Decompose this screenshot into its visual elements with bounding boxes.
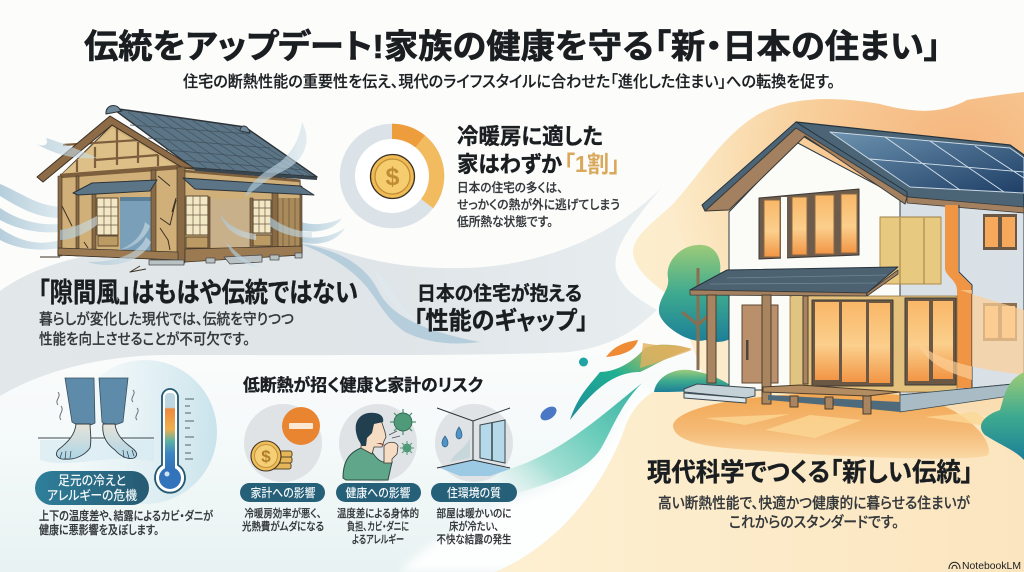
risk card: living environment: 不快な結露の発生 [436, 532, 512, 546]
posts [58, 167, 302, 263]
warm heat flow [915, 290, 1024, 380]
wave: performance gap band [0, 187, 662, 396]
illustration: modern insulated house with solar panels [684, 122, 1024, 460]
illustration: donut chart with coin [348, 132, 437, 220]
roof barge boards [702, 122, 907, 211]
icon: thermometer [155, 389, 194, 493]
risk card: health: よるアレルギー [352, 533, 404, 546]
walls [729, 142, 905, 390]
lower panels [98, 235, 271, 248]
text block: new tradition: 現代科学でつくる「新しい伝統」 [647, 459, 973, 487]
roof [112, 108, 317, 177]
porch roof [690, 267, 898, 293]
risk card: living environment: 部屋は暖かいのに [436, 506, 512, 520]
foundation [900, 383, 1024, 412]
text block: only 10 percent: 家はわずか [457, 152, 562, 177]
risk card: health: 温度差による身体的 [337, 506, 419, 520]
heading: performance gap [414, 282, 588, 335]
lower windows [812, 298, 956, 386]
awnings [73, 180, 157, 195]
side windows [983, 214, 1017, 341]
wind behind house [0, 184, 345, 250]
text block: only 10 percent: 日本の住宅の多くは、 [457, 180, 563, 195]
barge boards [37, 116, 194, 182]
illustration: cold feet [38, 360, 217, 504]
text block: only 10 percent: 低所熱な状態です。 [457, 214, 553, 229]
ground floor cutaway [790, 296, 957, 392]
shoji windows [97, 196, 271, 235]
warm background: new house side [495, 92, 1024, 572]
cutaway insulation and orange layer [880, 217, 941, 284]
heading: performance gap: 「性能のギャップ」 [414, 307, 588, 335]
right bush [981, 372, 1024, 460]
solar panels [830, 132, 1024, 193]
illustration: old Japanese house with drafts [0, 105, 345, 272]
text block: drafts are no longer tradition [38, 278, 358, 348]
text block: drafts are no longer tradition: 性能を向上させることが不可欠です。 [39, 330, 250, 348]
wind front [33, 122, 312, 268]
doorway [120, 197, 151, 251]
risk card: household budget [240, 404, 325, 533]
title: 伝統をアップデート!家族の健康を守る「新・日本の住まい」 [84, 28, 941, 66]
gable timbers [60, 128, 300, 181]
pill: cold feet and allergy: アレルギーの危機 [47, 488, 137, 503]
risk card: health [336, 404, 421, 546]
risk card: health: 健康への影響 [346, 485, 410, 500]
wall cracks [62, 176, 176, 250]
upper windows [759, 189, 859, 259]
risk card: living environment: 床が冷たい、 [449, 519, 499, 533]
text block: cold feet description [39, 508, 213, 537]
text block: only 10 percent [457, 124, 620, 229]
text block: cold feet description: 上下の温度差や、結露によるカビ・ダニが [39, 508, 213, 523]
text block: drafts are no longer tradition: 暮らしが変化した現代では、伝統を守りつつ [39, 310, 294, 328]
risk card: living environment: 住環境の質 [447, 485, 501, 500]
decorative leaves [538, 340, 692, 423]
text block: new tradition: 高い断熱性能で、快適かつ健康的に暮らせる住まいが [658, 494, 970, 512]
text block: only 10 percent: 「1割」 [564, 151, 620, 177]
risk card: household budget: 家計への影響 [250, 485, 316, 500]
pill: cold feet and allergy: 足元の冷えと [58, 473, 126, 488]
pill: cold feet and allergy [35, 471, 149, 505]
text block: only 10 percent: 冷暖房に適した [457, 124, 603, 149]
text block: cold feet description: 健康に悪影響を及ぼします。 [39, 522, 159, 537]
icon: coin: $ [386, 163, 400, 191]
ground glow [673, 393, 989, 459]
text block: new tradition: これからのスタンダードです。 [729, 513, 899, 531]
heading: risks: 低断熱が招く健康と家計のリスク [243, 375, 483, 395]
walls [58, 125, 302, 260]
roof [796, 122, 1024, 208]
text block: only 10 percent: せっかくの熱が外に逃げてしまう [457, 197, 620, 212]
text block: drafts are no longer tradition: 「隙間風」はもはや伝統ではない [38, 278, 358, 308]
risk card: household budget: $ [261, 447, 271, 466]
risk card: household budget: 光熱費がムダになる [242, 519, 324, 533]
subtitle: 住宅の断熱性能の重要性を伝え、現代のライフスタイルに合わせた「進化した住まい」への転換を促す。 [183, 73, 835, 91]
door and posts [742, 305, 778, 383]
text block: new tradition [647, 459, 973, 531]
logo: NotebookLM: NotebookLM [962, 560, 1021, 572]
teal swoosh [470, 383, 642, 498]
illustration: tree and bushes [640, 245, 738, 392]
risk card: living environment [431, 404, 517, 546]
risk card: household budget: 冷暖房効率が悪く、 [244, 506, 322, 520]
heading: performance gap: 日本の住宅が抱える [417, 282, 582, 305]
deck [763, 385, 900, 396]
risk card: health: 負担、カビ・ダニに [347, 519, 409, 533]
steps [684, 384, 755, 398]
engawa and foundation [58, 248, 178, 260]
gable plaster [62, 128, 178, 174]
